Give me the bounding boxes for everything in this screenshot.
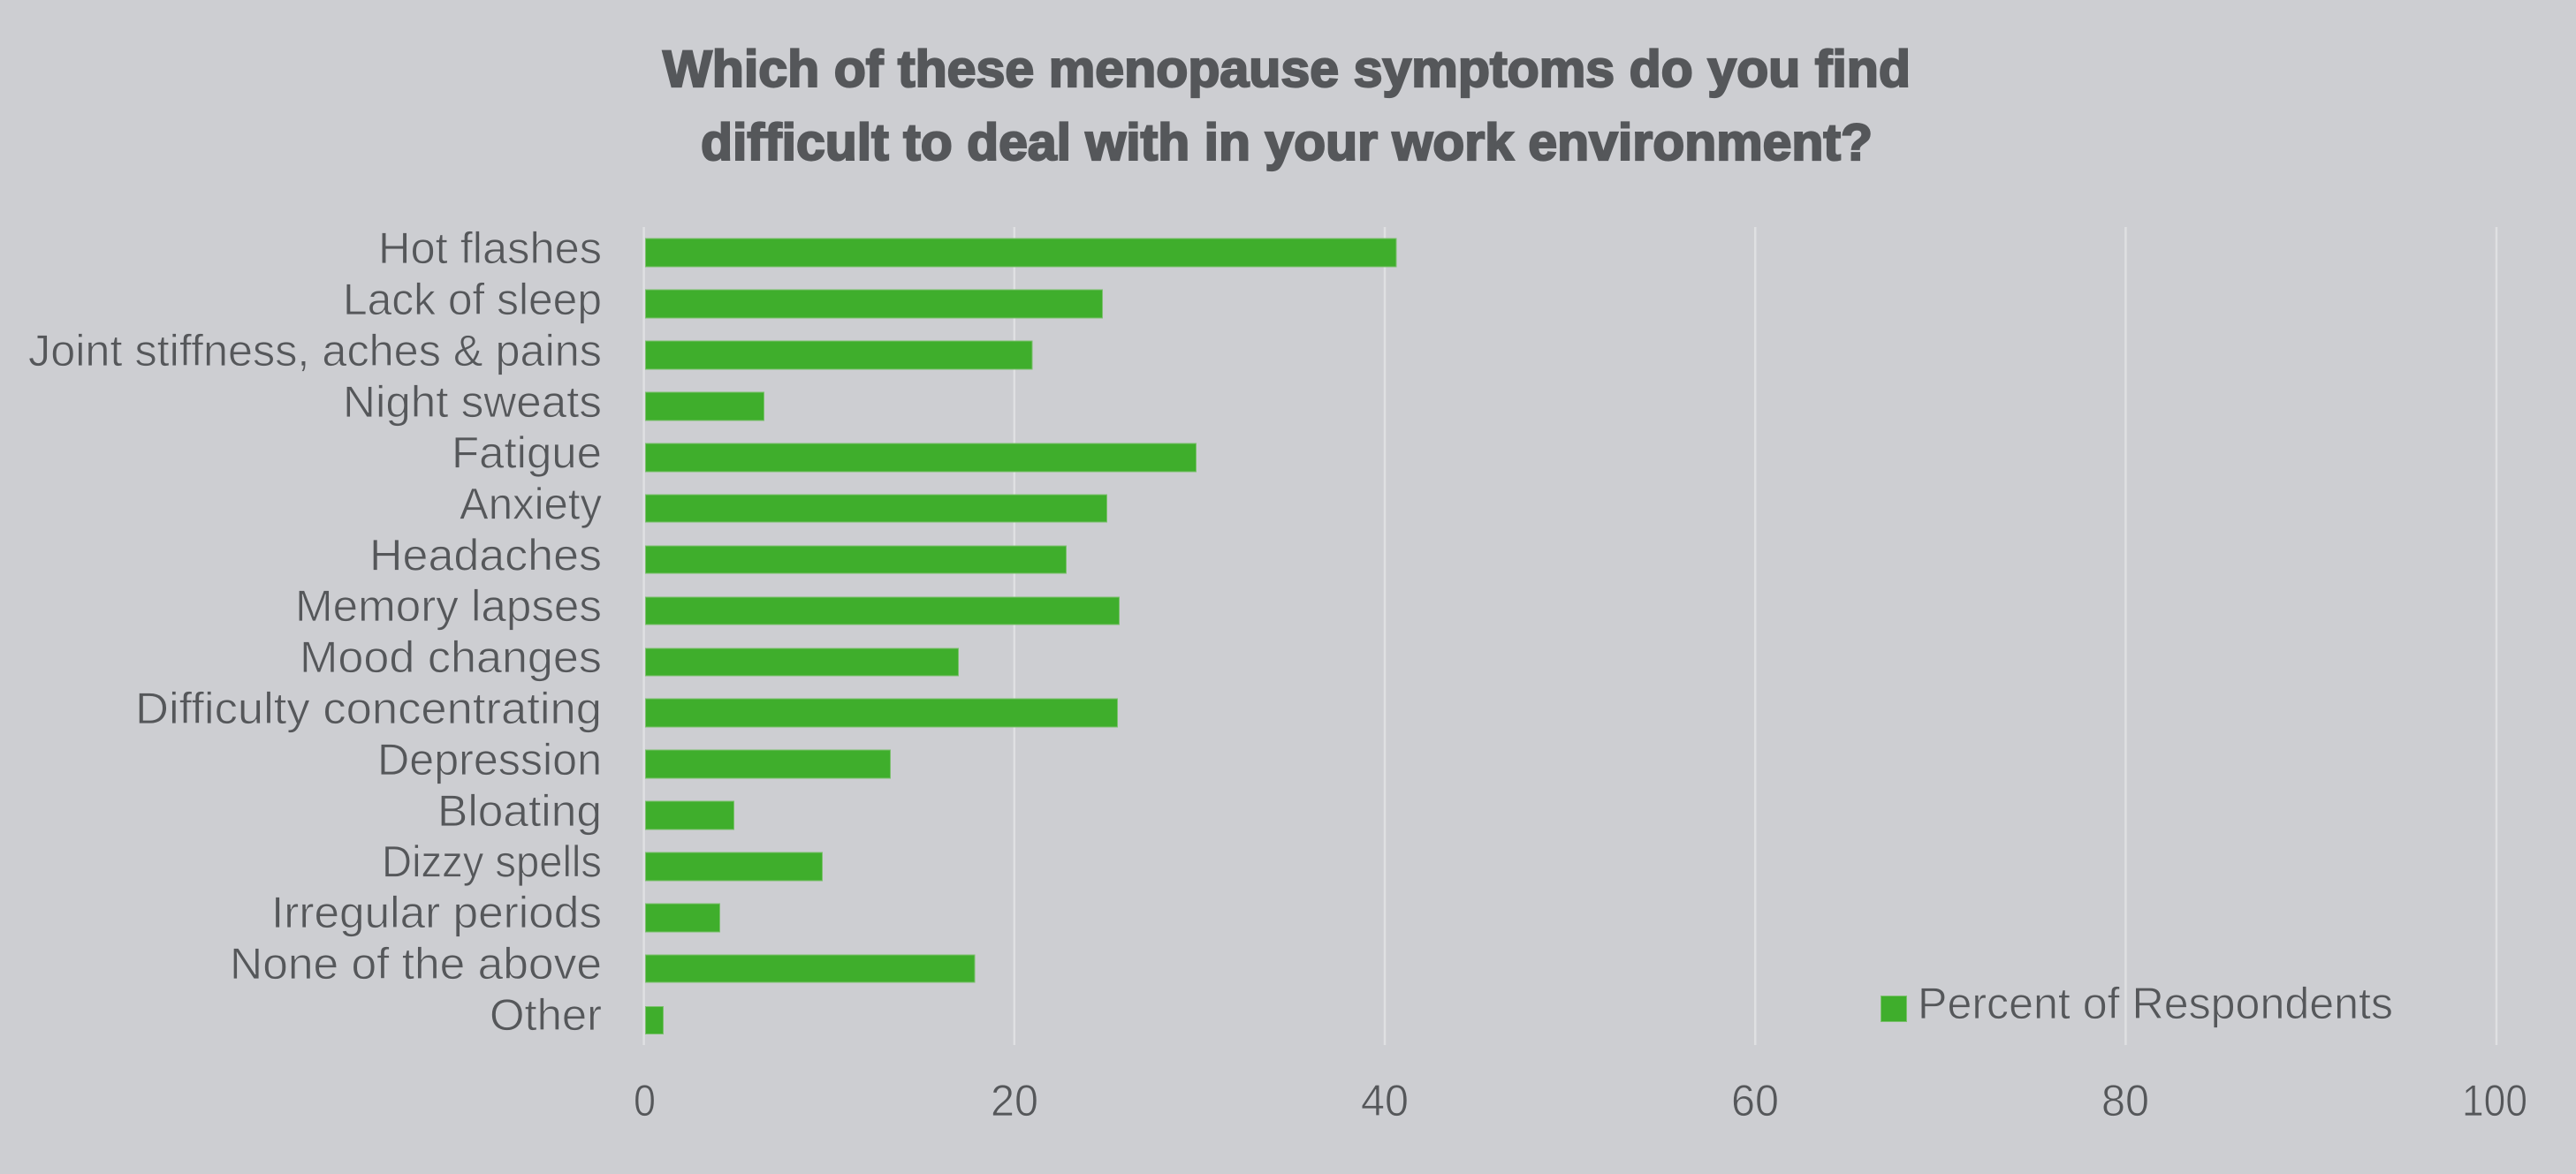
category labels: Difficulty concentrating bbox=[135, 684, 602, 733]
category labels: Dizzy spells bbox=[382, 837, 602, 887]
x axis tick labels: 40 bbox=[1361, 1076, 1409, 1125]
category labels bbox=[28, 223, 602, 1040]
x axis tick labels: 0 bbox=[634, 1076, 656, 1125]
category labels: Anxiety bbox=[460, 479, 602, 528]
category labels: Headaches bbox=[369, 530, 602, 579]
category labels: Night sweats bbox=[343, 377, 602, 427]
x axis tick labels: 60 bbox=[1731, 1076, 1779, 1125]
x axis tick labels: 100 bbox=[2462, 1076, 2527, 1125]
category labels: Other bbox=[490, 990, 602, 1040]
x axis tick labels: 20 bbox=[991, 1076, 1038, 1125]
legend: Percent of Respondents bbox=[1918, 979, 2393, 1028]
category labels: Bloating bbox=[437, 786, 602, 836]
category labels: Joint stiffness, aches & pains bbox=[28, 326, 602, 375]
title bbox=[663, 41, 1911, 171]
x axis tick labels: 80 bbox=[2101, 1076, 2149, 1125]
title: Which of these menopause symptoms do you find bbox=[663, 41, 1911, 98]
category labels: Mood changes bbox=[300, 632, 602, 682]
category labels: Depression bbox=[377, 735, 602, 784]
category labels: Memory lapses bbox=[295, 581, 602, 631]
category labels: Irregular periods bbox=[271, 888, 602, 937]
category labels: Hot flashes bbox=[378, 223, 602, 273]
category labels: Lack of sleep bbox=[343, 275, 602, 324]
x axis tick labels bbox=[634, 1076, 2527, 1125]
category labels: None of the above bbox=[230, 939, 602, 988]
category labels: Fatigue bbox=[452, 428, 602, 477]
title: difficult to deal with in your work environment? bbox=[701, 114, 1873, 171]
bars: percent of respondents bbox=[645, 239, 1396, 1034]
